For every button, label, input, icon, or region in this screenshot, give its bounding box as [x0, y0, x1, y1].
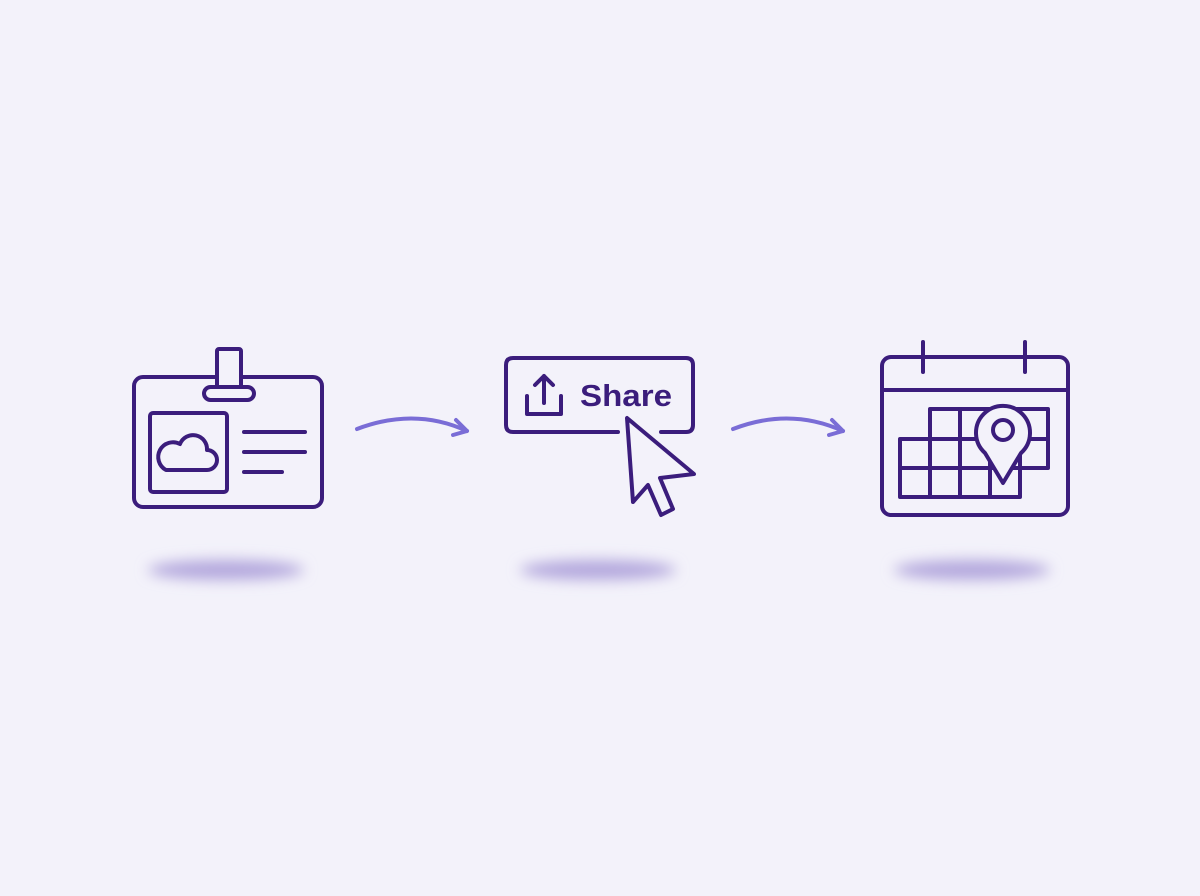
- icon: calendar: [882, 342, 1068, 515]
- arrow 2: [733, 418, 843, 435]
- label: Share: Share: [580, 378, 672, 413]
- shadow: share: [520, 560, 676, 580]
- arrow 1: [357, 418, 467, 435]
- shadow: calendar: [894, 560, 1050, 580]
- icon: upload: [527, 376, 561, 414]
- icon: location pin: [976, 406, 1030, 483]
- shadow: badge: [148, 560, 304, 580]
- calendar grid: [900, 409, 1048, 497]
- icon: cloud: [158, 435, 217, 470]
- icon: ID badge: [134, 349, 322, 507]
- share button: [506, 358, 694, 515]
- icon: cursor: [627, 418, 694, 515]
